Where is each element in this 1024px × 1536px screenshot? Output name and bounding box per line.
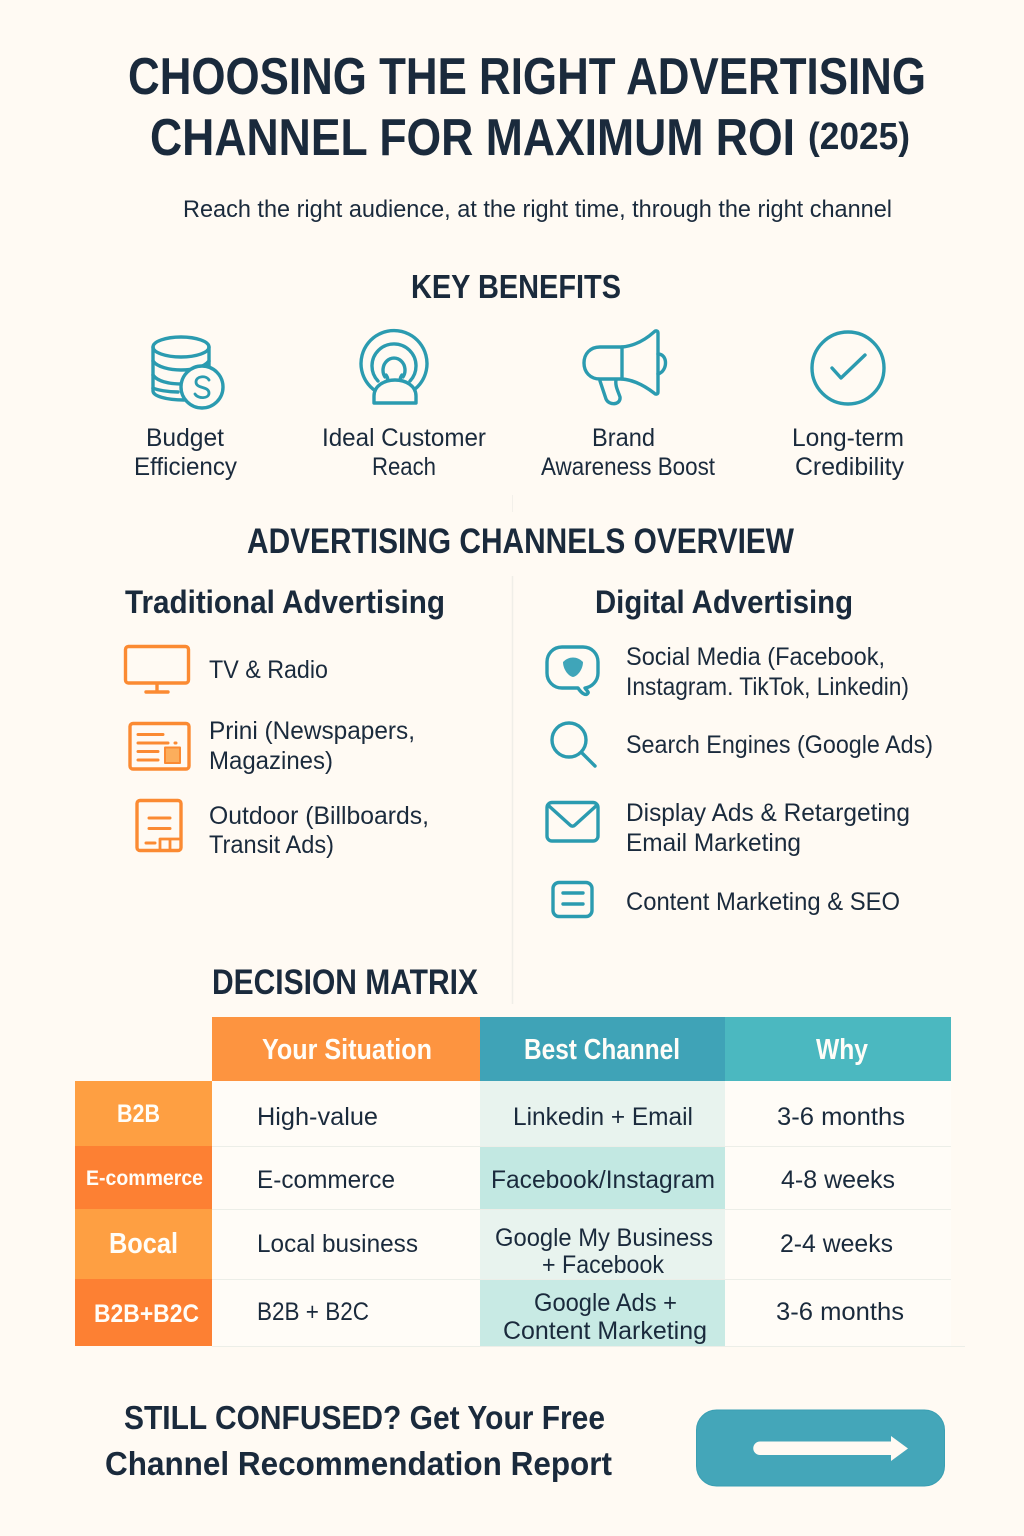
panel: traditional advertising [125, 584, 445, 859]
label: budget efficiency: Efficiency [134, 453, 237, 481]
row labels [86, 1100, 203, 1328]
column: best channel: Content Marketing [503, 1317, 707, 1345]
label: print: Magazines) [209, 747, 333, 775]
column: best channel: Linkedin + Email [513, 1103, 693, 1131]
icon: check circle [812, 332, 884, 404]
label: search engines: Search Engines (Google Ads) [626, 731, 933, 759]
item: outdoor [137, 800, 429, 859]
icon: television [126, 646, 188, 692]
column: why: 4-8 weeks [781, 1166, 895, 1194]
benefit: long-term credibility [792, 332, 904, 481]
label: budget efficiency [134, 424, 237, 481]
column: your situation [257, 1103, 418, 1326]
label: display and email: Email Marketing [626, 829, 801, 857]
column: best channel [491, 1103, 715, 1345]
label: content marketing: Content Marketing & SEO [626, 888, 900, 916]
label: long-term credibility: Long-term [792, 424, 904, 452]
label: outdoor: Transit Ads) [209, 831, 334, 859]
column: best channel: Facebook/Instagram [491, 1166, 715, 1194]
item: print [130, 717, 415, 775]
column: best channel: + Facebook [542, 1251, 664, 1279]
column: why [776, 1103, 905, 1326]
benefit: ideal customer reach [322, 331, 486, 481]
label: display and email [626, 799, 910, 857]
call to action text: Channel Recommendation Report [105, 1445, 612, 1482]
item: content marketing [553, 882, 900, 916]
icon: chat bubble [547, 647, 598, 694]
icon: newspaper [130, 724, 189, 769]
heading: decision matrix: DECISION MATRIX [212, 963, 479, 1002]
label: print: Prini (Newspapers, [209, 717, 415, 745]
label: brand awareness boost: Brand [592, 424, 655, 452]
column: your situation: B2B + B2C [257, 1298, 369, 1326]
benefit: brand awareness boost [541, 331, 715, 481]
label: brand awareness boost: Awareness Boost [541, 453, 715, 481]
icon: envelope [547, 802, 598, 841]
label: social media: Social Media (Facebook, [626, 643, 885, 671]
table header [262, 1034, 868, 1066]
column: why: 3-6 months [777, 1103, 905, 1131]
column: best channel: Google My Business [495, 1224, 713, 1252]
row labels: E-commerce [86, 1167, 203, 1190]
title: CHANNEL FOR MAXIMUM ROI [150, 109, 795, 167]
call to action text [105, 1399, 612, 1482]
table header: Your Situation [262, 1034, 432, 1066]
icon: person in target rings [361, 331, 427, 403]
column: why: 2-4 weeks [780, 1230, 893, 1258]
label: outdoor [209, 802, 429, 859]
label: display and email: Display Ads & Retargeting [626, 799, 910, 827]
panel: digital advertising [547, 584, 933, 916]
label: budget efficiency: Budget [146, 424, 224, 452]
row labels: B2B [117, 1100, 160, 1128]
table header: Best Channel [524, 1034, 680, 1066]
icon: arrow [753, 1436, 908, 1461]
icon: database with coin [153, 337, 223, 408]
label: social media [626, 643, 909, 701]
table backgrounds [75, 1017, 965, 1346]
label: brand awareness boost [541, 424, 715, 481]
label: social media: Instagram. TikTok, Linkedin) [626, 673, 909, 701]
item: search engines [552, 723, 933, 766]
column: your situation: High-value [257, 1103, 378, 1131]
table header: Why [816, 1034, 868, 1066]
label: ideal customer reach [322, 424, 486, 481]
column: best channel: Google Ads + [534, 1289, 677, 1317]
call to action text: STILL CONFUSED? Get Your Free [124, 1399, 605, 1436]
item: display and email [547, 799, 910, 857]
icon: megaphone [584, 331, 666, 404]
column: why: 3-6 months [776, 1298, 904, 1326]
heading: key benefits: KEY BENEFITS [411, 268, 621, 305]
label: long-term credibility [792, 424, 904, 481]
label: tv and radio: TV & Radio [209, 656, 328, 684]
label: outdoor: Outdoor (Billboards, [209, 802, 429, 830]
benefit: budget efficiency [134, 337, 237, 481]
label: print [209, 717, 415, 775]
row labels: Bocal [109, 1228, 178, 1260]
label: ideal customer reach: Reach [372, 453, 436, 481]
panel: decision matrix table [75, 1017, 965, 1346]
heading: digital advertising: Digital Advertising [595, 584, 853, 620]
icon: billboard sheet [137, 800, 181, 850]
label: long-term credibility: Credibility [795, 453, 904, 481]
column: your situation: E-commerce [257, 1166, 395, 1194]
icon: magnifying glass [552, 723, 595, 766]
column: your situation: Local business [257, 1230, 418, 1258]
icon: document [553, 882, 592, 916]
row labels: B2B+B2C [94, 1300, 199, 1328]
call to action button [696, 1410, 944, 1486]
panel: key benefits [134, 331, 904, 481]
heading: advertising channels overview: ADVERTISING CHANNELS OVERVIEW [247, 522, 794, 561]
title: (2025) [808, 116, 910, 158]
subtitle: Reach the right audience, at the right time, through the right channel [183, 196, 892, 223]
label: ideal customer reach: Ideal Customer [322, 424, 486, 452]
heading: traditional advertising: Traditional Advertising [125, 584, 445, 620]
item: social media [547, 643, 909, 701]
title [128, 48, 926, 167]
item: tv and radio [126, 646, 328, 692]
